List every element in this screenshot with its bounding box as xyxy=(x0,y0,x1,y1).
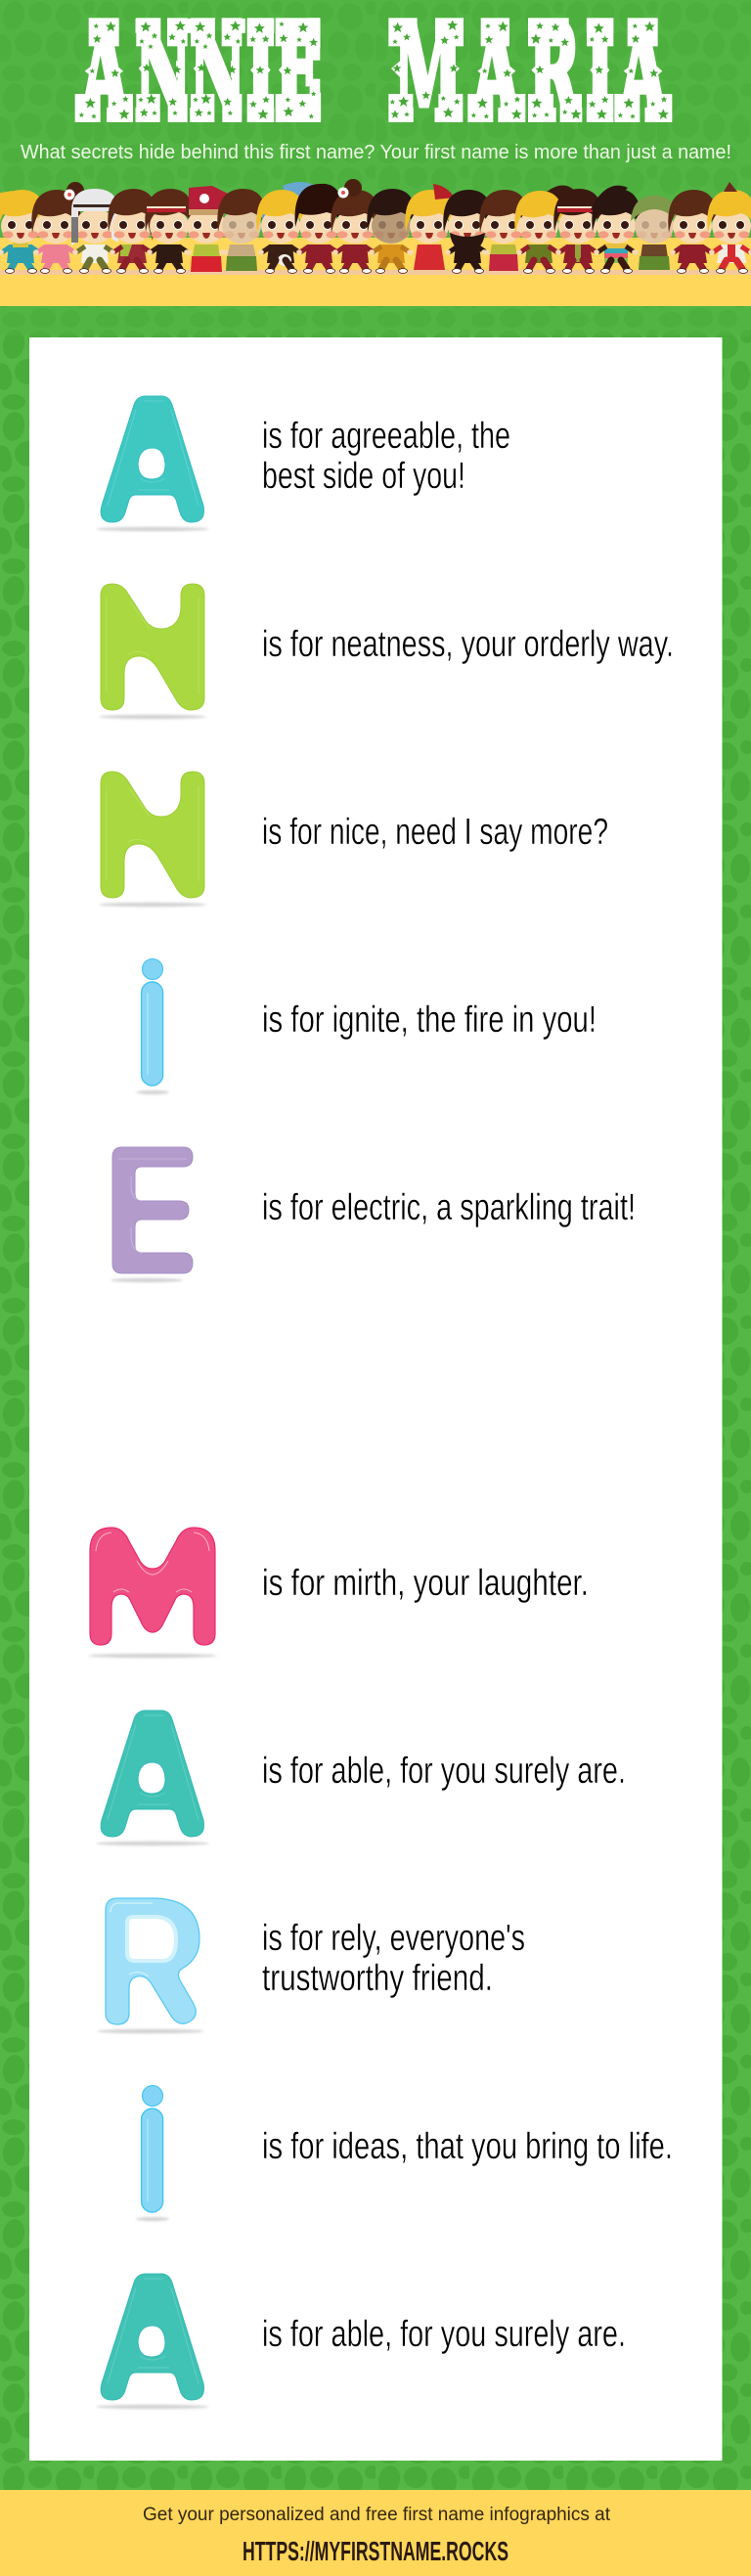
subtitle: What secrets hide behind this first name? Your first name is more than just a name! xyxy=(21,142,731,163)
row: I is for ideas xyxy=(136,2085,673,2221)
letter i icon xyxy=(136,958,169,1094)
row: R is for rely xyxy=(97,1898,525,2033)
text: agreeable: best side of you! xyxy=(262,456,465,497)
letter R icon xyxy=(97,1898,204,2033)
row: A is for agreeable xyxy=(96,396,510,531)
text: agreeable xyxy=(262,416,510,497)
letter M icon xyxy=(88,1528,217,1658)
yellow banner behind characters xyxy=(0,238,751,306)
letter N icon xyxy=(99,584,206,719)
row: A is for able xyxy=(96,1710,626,1845)
row: N is for neatness xyxy=(99,584,674,719)
row: N is for nice xyxy=(99,772,608,907)
letter E icon xyxy=(110,1147,193,1282)
text: able: is for able, for you surely are. xyxy=(262,1751,626,1792)
letter N icon xyxy=(99,772,206,907)
row: E is for electric xyxy=(110,1147,636,1282)
letter A icon xyxy=(96,1710,209,1845)
footer bar xyxy=(0,2490,751,2576)
main white panel xyxy=(29,337,722,2461)
text: rely: is for rely, everyone's xyxy=(262,1918,525,1959)
letter A icon xyxy=(96,396,209,531)
illustration: row of costumed children xyxy=(0,179,751,273)
text: rely xyxy=(262,1918,525,1999)
letter i icon xyxy=(136,2085,169,2221)
text: mirth: is for mirth, your laughter. xyxy=(262,1563,589,1604)
footer text: Get your personalized and free first name infographics at xyxy=(143,2505,611,2525)
text: ignite: is for ignite, the fire in you! xyxy=(262,999,596,1041)
softened header background xyxy=(0,0,751,335)
footer url: HTTPS://MYFIRSTNAME.ROCKS xyxy=(243,2536,508,2566)
text: agreeable: is for agreeable, the xyxy=(262,416,510,457)
text: able: is for able, for you surely are. xyxy=(262,2314,626,2355)
row: M is for mirth xyxy=(88,1528,589,1658)
text: nice: is for nice, need I say more? xyxy=(262,812,608,853)
letter A icon xyxy=(96,2274,209,2409)
text: electric: is for electric, a sparkling trait! xyxy=(262,1187,636,1228)
row: I is for ignite xyxy=(136,958,596,1094)
row: A is for able (last) xyxy=(96,2274,626,2409)
text: rely: trustworthy friend. xyxy=(262,1958,493,1999)
